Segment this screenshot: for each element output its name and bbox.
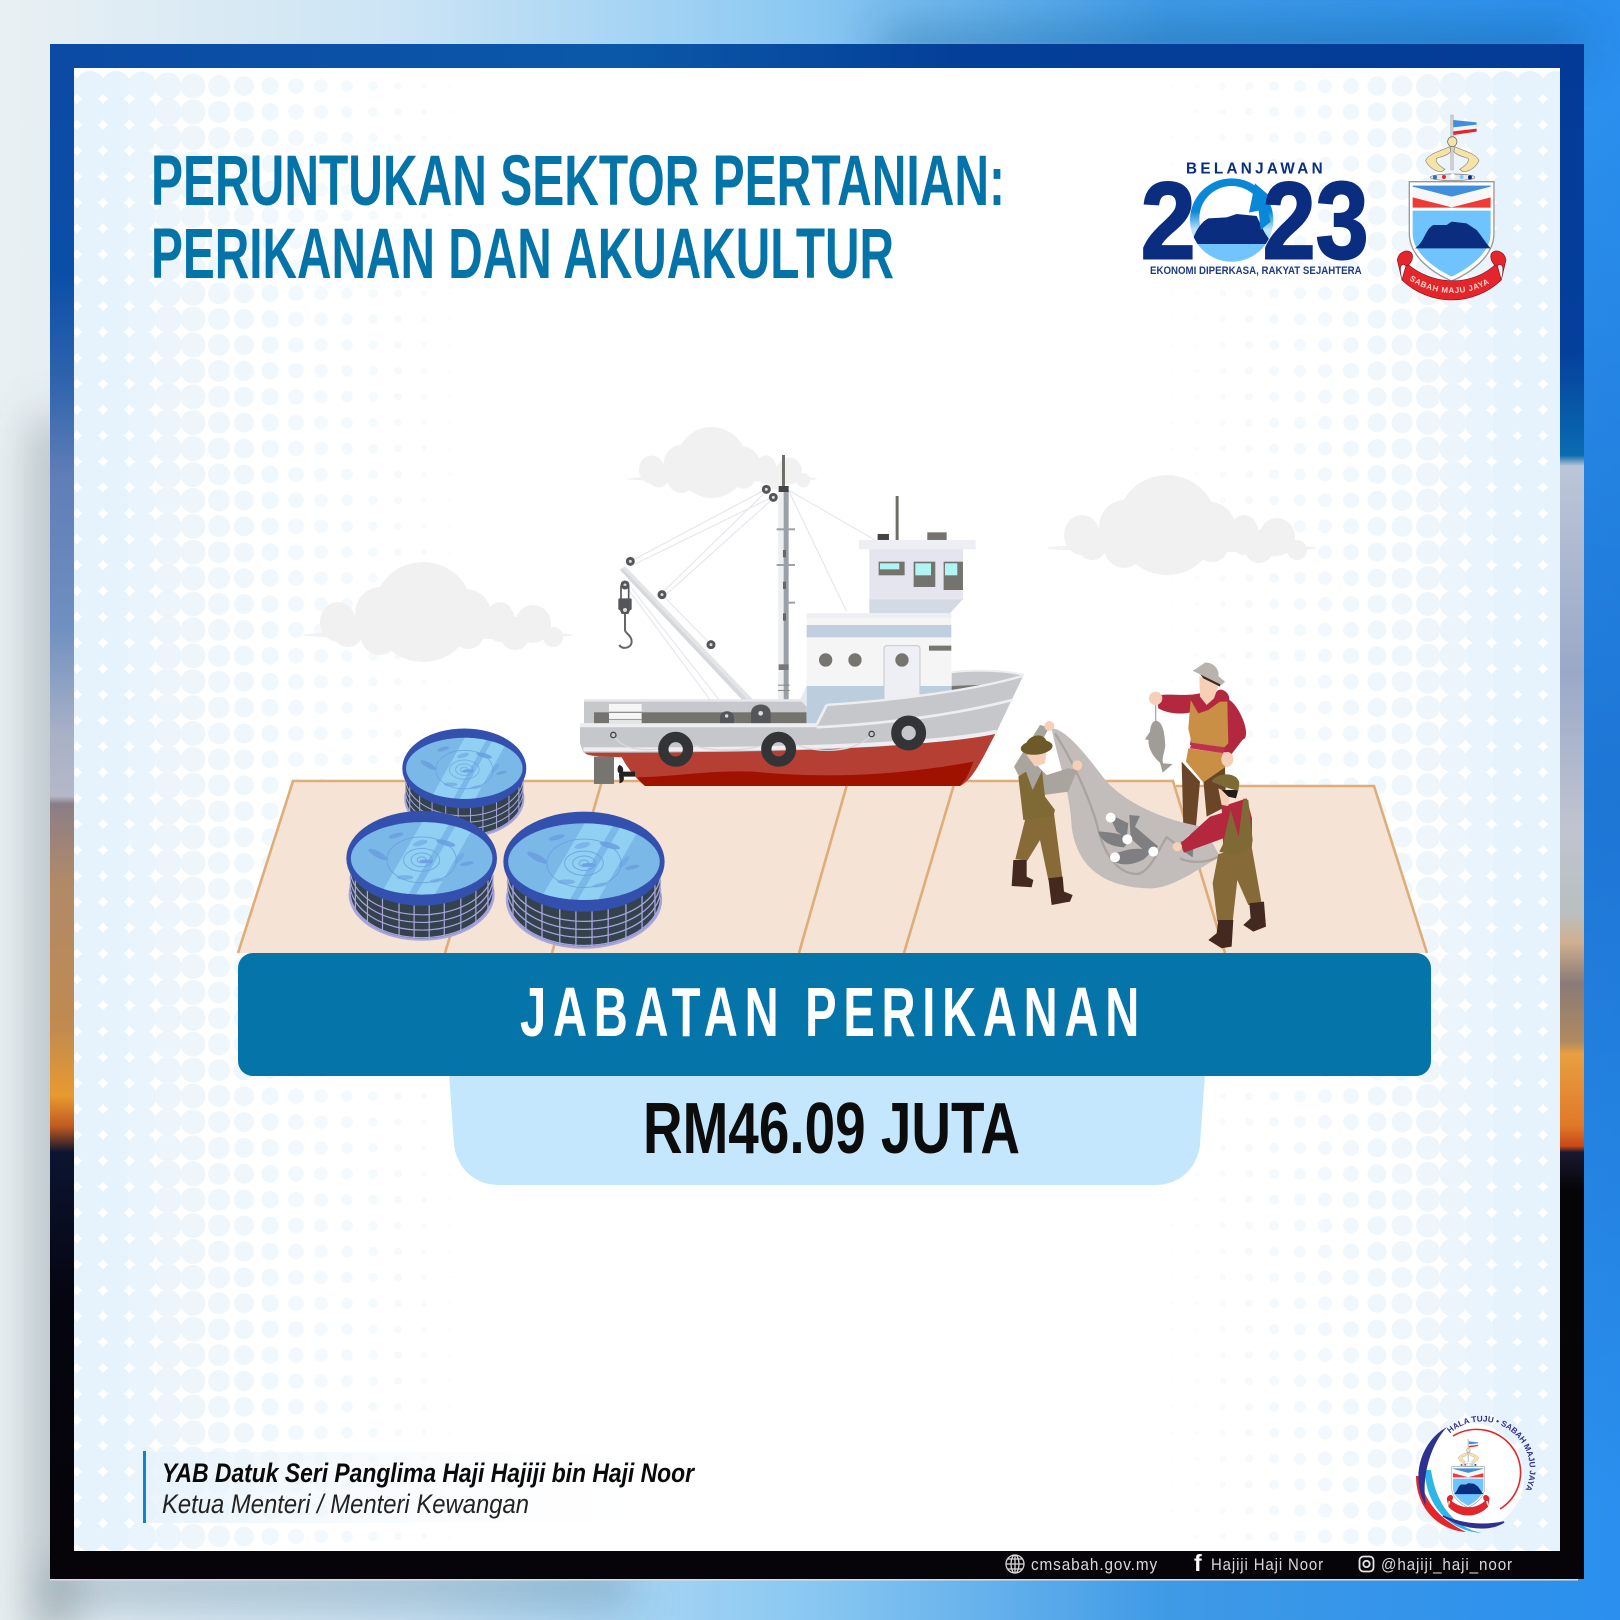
logo: Belanjawan 2023: 2 <box>1141 160 1196 282</box>
department banner: JABATAN PERIKANAN <box>520 973 1146 1051</box>
department banner <box>238 953 1431 1076</box>
title <box>151 142 1005 294</box>
platform tiles <box>238 781 1427 953</box>
logo: Belanjawan 2023: EKONOMI DIPERKASA, RAKYAT SEJAHTERA <box>1150 265 1362 277</box>
fish cages <box>346 728 665 949</box>
minister credit <box>143 1451 706 1523</box>
cargo hook <box>618 587 632 648</box>
fishermen with net <box>1012 663 1266 948</box>
amount panel: RM46.09 JUTA <box>643 1089 1020 1169</box>
icon: instagram <box>1360 1556 1374 1572</box>
logo: Belanjawan 2023 <box>1141 160 1369 282</box>
fisherman at left <box>1012 721 1082 905</box>
boat hull <box>580 671 1024 786</box>
footer social links: f <box>1194 1550 1202 1576</box>
title: PERIKANAN DAN AKUAKULTUR <box>151 215 894 294</box>
hanging fish <box>1145 705 1173 773</box>
standing fisherman holding fish <box>1149 663 1246 827</box>
net with catch <box>1052 728 1220 888</box>
footer social links: Hajiji Haji Noor <box>1211 1555 1324 1574</box>
clouds <box>303 427 1317 662</box>
logo: Belanjawan 2023: 23 <box>1263 160 1369 282</box>
logo: Belanjawan 2023: BELANJAWAN <box>1186 160 1326 177</box>
boat rigging and mast <box>618 455 875 723</box>
footer social links <box>1006 1550 1513 1576</box>
logo: Hala Tuju Sabah Maju Jaya: HALA TUJU • SABAH MAJU JAYA <box>1446 1416 1536 1490</box>
footer social links: @hajiji_haji_noor <box>1381 1555 1513 1574</box>
title: PERUNTUKAN SEKTOR PERTANIAN: <box>151 142 1005 221</box>
boat rear deck <box>584 699 807 723</box>
fisherman at right <box>1173 774 1266 948</box>
minister credit: Ketua Menteri / Menteri Kewangan <box>162 1489 529 1519</box>
amount panel <box>448 1060 1206 1185</box>
boat wheelhouse <box>800 496 976 727</box>
icon: globe <box>1006 1555 1024 1573</box>
logo: Sabah coat of arms: SABAH MAJU JAYA <box>1410 276 1490 293</box>
boat stern post and propeller <box>594 757 635 784</box>
logo: Hala Tuju Sabah Maju Jaya <box>1416 1416 1536 1533</box>
back cage <box>402 728 526 838</box>
minister credit: YAB Datuk Seri Panglima Haji Hajiji bin Haji Noor <box>162 1458 695 1488</box>
fishing boat <box>580 455 1024 786</box>
footer social links: cmsabah.gov.my <box>1031 1555 1158 1574</box>
right cage <box>503 812 665 949</box>
left cage <box>346 811 497 941</box>
logo: Sabah coat of arms <box>1397 114 1506 300</box>
